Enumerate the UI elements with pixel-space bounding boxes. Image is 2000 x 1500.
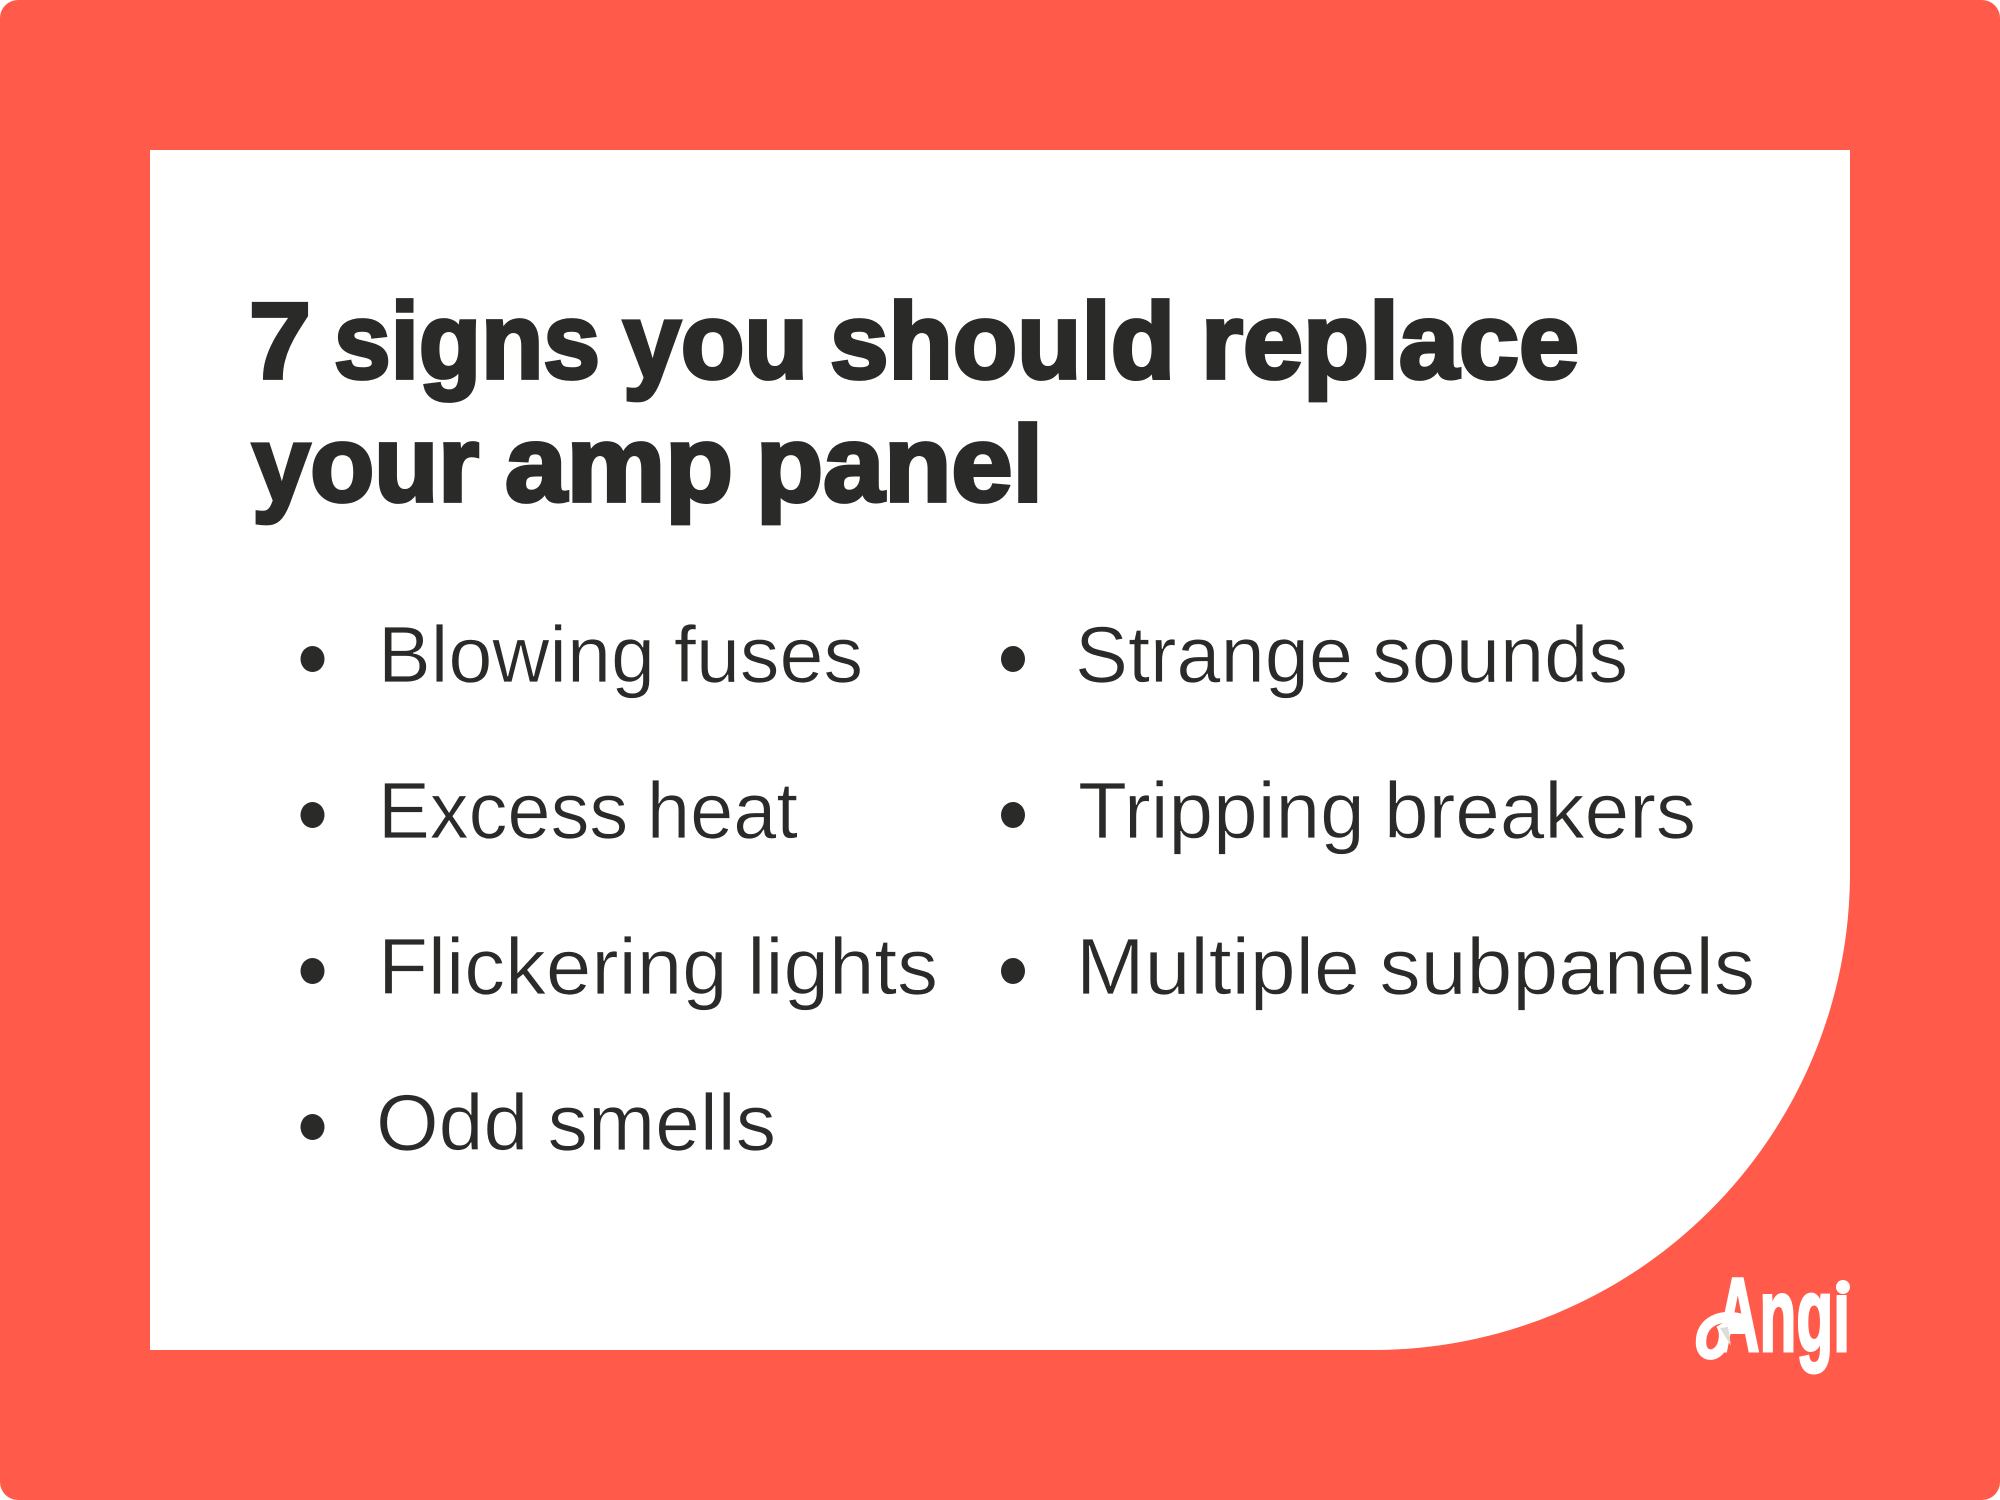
list item: Odd smells: Odd smells (376, 1078, 776, 1167)
list item: Excess heat: Excess heat (378, 766, 798, 855)
panel: white content card with curved corner (150, 150, 1850, 1350)
list: right column of signs (1001, 610, 1755, 1011)
title: amp (505, 403, 733, 524)
title: replace (1201, 280, 1579, 401)
title: 7 (249, 280, 311, 401)
title: panel (756, 403, 1043, 524)
list item: Tripping breakers: Tripping breakers (1078, 766, 1696, 855)
title: signs (334, 280, 600, 401)
list item: Strange sounds: Strange sounds (1075, 610, 1628, 699)
title (249, 280, 1579, 524)
title: your (252, 403, 479, 524)
list item: Blowing fuses: Blowing fuses (378, 610, 863, 699)
list item: Flickering lights: Flickering lights (378, 922, 938, 1011)
title: should (830, 280, 1175, 401)
list item: Multiple subpanels: Multiple subpanels (1076, 922, 1755, 1011)
logo: Angi (1701, 1257, 1854, 1374)
logo: Angi: Angi (1716, 1257, 1850, 1374)
title: you (623, 280, 808, 401)
list: left column of signs (300, 610, 938, 1167)
